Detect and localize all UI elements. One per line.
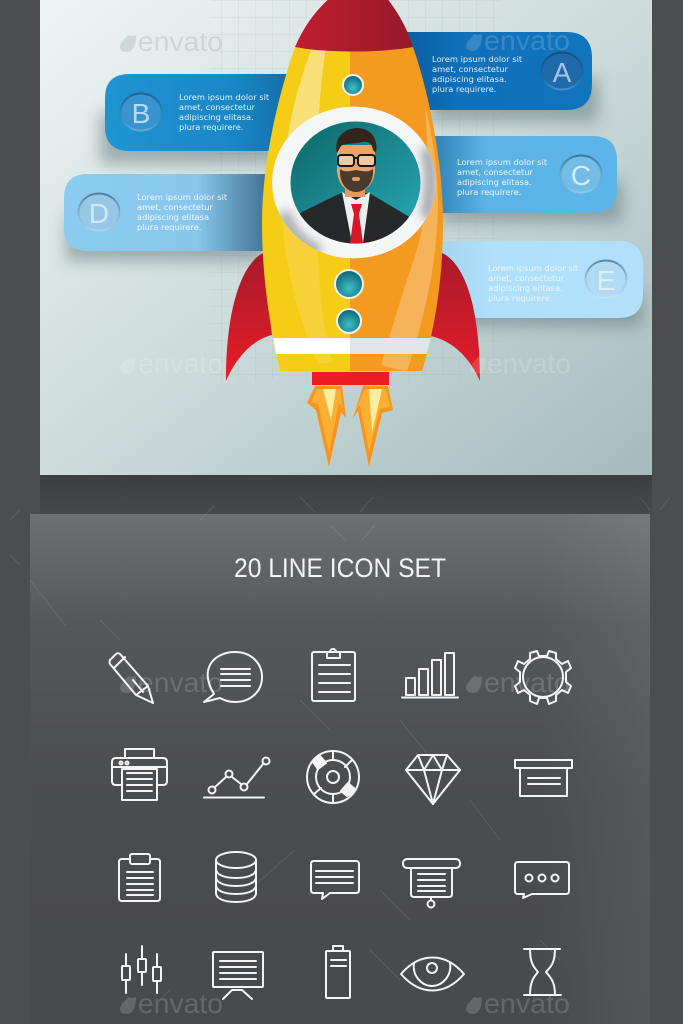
icon: eye xyxy=(401,958,464,990)
icon: printer xyxy=(112,749,167,800)
watermark: envato xyxy=(138,988,223,1019)
card D: D xyxy=(89,198,109,229)
card E: adipiscing elitasa. xyxy=(488,283,563,293)
icon: diamond xyxy=(406,755,460,804)
icon: chat rectangle xyxy=(311,861,359,899)
card B: plura requirere. xyxy=(179,122,243,132)
card C xyxy=(430,136,617,213)
icon: line graph xyxy=(204,758,270,798)
icon: speech bubble xyxy=(204,652,262,702)
card A: Lorem ipsum dolor sit xyxy=(432,54,523,64)
left flame xyxy=(307,386,346,467)
card D: amet, consectetur xyxy=(137,202,214,212)
nose cone xyxy=(295,0,413,52)
icon: casino chip xyxy=(307,751,359,803)
icon: clipboard small xyxy=(119,854,160,901)
icon: dots bubble xyxy=(515,862,569,898)
card B xyxy=(105,74,290,151)
panel: line icon set xyxy=(30,514,650,1024)
white band xyxy=(273,338,350,354)
card E: Lorem ipsum dolor sit xyxy=(488,263,579,273)
card B: adipiscing elitasa. xyxy=(179,112,254,122)
window middle xyxy=(335,270,363,298)
card B: B xyxy=(132,98,150,129)
watermark: envato xyxy=(138,26,223,57)
card D xyxy=(64,174,270,251)
card shadows xyxy=(66,78,642,326)
portrait: man with beard and glasses xyxy=(290,122,425,250)
card A: A xyxy=(553,57,572,88)
card E: amet, consectetur xyxy=(488,273,565,283)
icon: projector screen xyxy=(403,859,460,908)
icon: archive box xyxy=(515,760,572,796)
watermark: envato xyxy=(487,348,571,379)
card B: amet, consectetur xyxy=(179,102,256,112)
card A: plura requirere. xyxy=(432,84,496,94)
icon: pencil xyxy=(110,653,153,703)
icon: bar chart xyxy=(402,653,458,698)
card B: Lorem ipsum dolor sit xyxy=(179,92,270,102)
icon: database xyxy=(216,852,256,902)
scratch marks overlay xyxy=(10,497,670,1000)
card A: adipiscing elitasa. xyxy=(432,74,507,84)
icon: battery xyxy=(326,946,350,998)
icon: gear xyxy=(515,651,571,704)
watermark: envato xyxy=(484,988,570,1019)
card C: C xyxy=(571,160,591,191)
icon: hourglass xyxy=(524,949,561,995)
watermark: envato xyxy=(138,667,223,698)
watermark: envato xyxy=(138,348,223,379)
watermark: envato xyxy=(484,25,570,56)
card E: plura requirere. xyxy=(488,293,552,303)
card C: Lorem ipsum dolor sit xyxy=(457,157,548,167)
card D: plura requirere. xyxy=(137,222,201,232)
porthole ring xyxy=(272,106,436,258)
icon: clipboard xyxy=(312,649,355,701)
card A: amet, consectetur xyxy=(432,64,509,74)
icon: presentation board xyxy=(213,952,263,999)
left fin xyxy=(226,253,272,381)
panel: rocket infographic xyxy=(40,0,652,475)
card D: adipiscing elitasa xyxy=(137,212,209,222)
card E: E xyxy=(597,265,615,296)
card C: amet, consectetur xyxy=(457,167,534,177)
window lower xyxy=(337,309,361,333)
right fin xyxy=(430,253,480,381)
watermark: envato xyxy=(484,667,570,698)
body xyxy=(262,47,443,371)
nozzle xyxy=(312,372,389,385)
icon: candlestick sliders xyxy=(122,946,161,993)
card E xyxy=(430,241,643,318)
small window top xyxy=(343,75,363,95)
card A xyxy=(400,32,592,110)
shadow band between panels xyxy=(40,475,652,515)
rocket xyxy=(226,0,480,467)
card D: Lorem ipsum dolor sit xyxy=(137,192,228,202)
right flame xyxy=(353,386,393,467)
card C: plura requirere. xyxy=(457,187,521,197)
card C: adipiscing elitasa. xyxy=(457,177,532,187)
title: 20 LINE ICON SET xyxy=(234,553,446,583)
